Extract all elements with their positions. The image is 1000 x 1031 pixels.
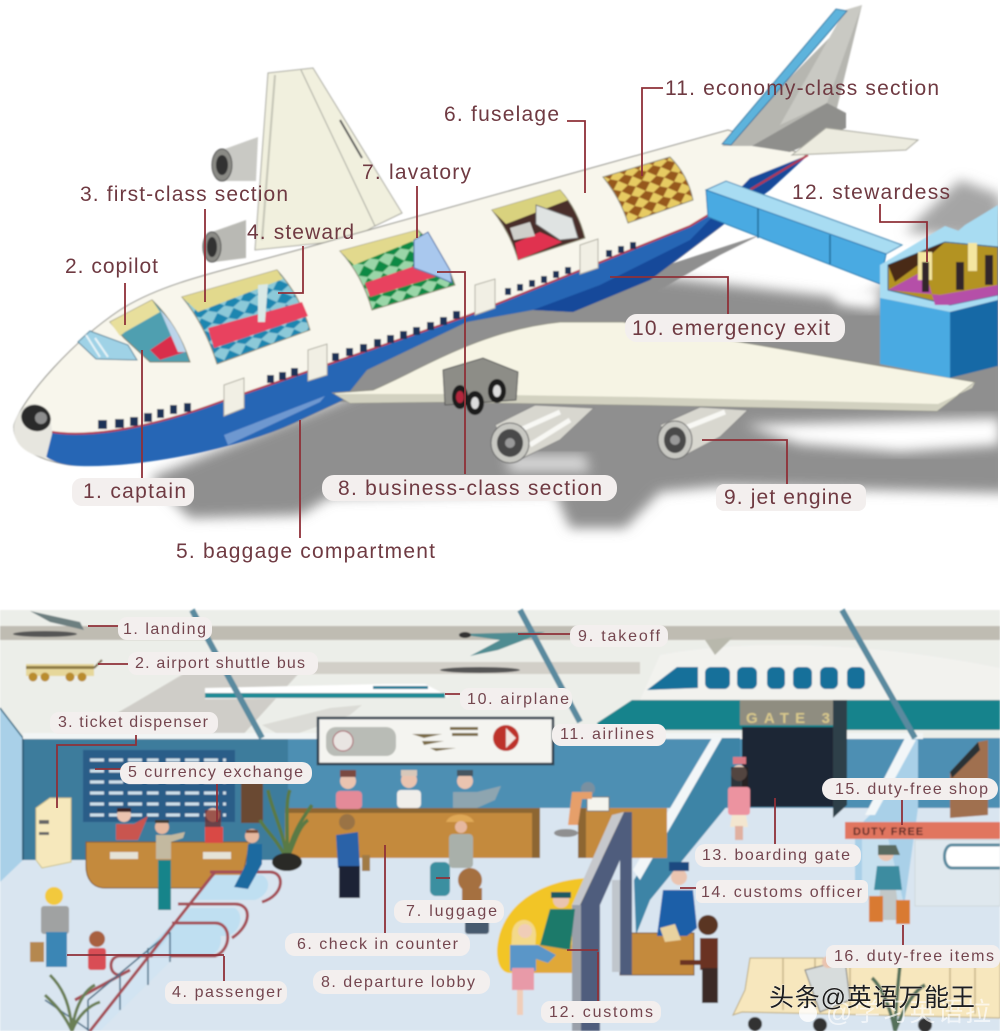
people: stewardess — [728, 757, 750, 840]
label: 4. steward: 4. steward — [247, 221, 354, 244]
watermark: @学习英语拉 — [826, 997, 991, 1027]
label: 5. baggage compartment: 5. baggage compartment — [176, 540, 435, 563]
label: 9. takeoff: 9. takeoff — [578, 628, 661, 645]
label: 15. duty-free shop — [822, 778, 998, 800]
terminal illustration — [0, 610, 1000, 1031]
people: boy and girl in queue — [30, 887, 106, 970]
panel: airport terminal scene — [0, 610, 1000, 1031]
label: 12. customs — [541, 1001, 661, 1023]
blue ramp — [633, 738, 740, 935]
label: 2. airport shuttle bus — [128, 652, 318, 675]
distant airplane — [205, 684, 450, 738]
desk at far gate — [578, 797, 667, 858]
label: 14. customs officer: 14. customs officer — [701, 884, 863, 901]
shop display — [950, 740, 988, 818]
ticket dispenser — [36, 798, 71, 868]
check-in counter — [285, 808, 540, 858]
arrivals board — [83, 750, 235, 822]
people: seated man in blue — [234, 829, 262, 889]
large airplane outside — [597, 637, 1000, 730]
duty free banner — [845, 822, 1000, 839]
label: 11. economy-class section: 11. economy-class section — [665, 77, 939, 100]
label: 8. business-class section: 8. business-class section — [338, 477, 602, 500]
terminal wall — [0, 708, 1000, 1031]
label: 10. airplane: 10. airplane — [467, 691, 569, 708]
cutaway: first-class section — [182, 270, 310, 364]
man reading newspaper — [805, 956, 850, 1012]
label: 12. stewardess: 12. stewardess — [792, 181, 950, 204]
label: 8. departure lobby — [313, 970, 490, 994]
label: 5 currency exchange: 5 currency exchange — [128, 764, 303, 781]
far wing — [255, 68, 402, 250]
label: 7. luggage: 7. luggage — [406, 903, 497, 920]
jet engine right — [658, 407, 748, 459]
airlines sign — [318, 718, 553, 764]
belly panels and windows — [98, 239, 636, 445]
label: 1. captain: 1. captain — [83, 480, 186, 503]
tail stabilizer — [792, 128, 918, 155]
glass railing — [45, 872, 215, 1031]
leader lines — [125, 88, 927, 538]
people: check-in passenger — [336, 814, 370, 898]
jet bridge — [706, 181, 902, 284]
plant bottom left — [45, 975, 100, 1031]
label: 11. airlines — [552, 724, 666, 746]
label: 12. customs: 12. customs — [549, 1004, 653, 1021]
label: 2. airport shuttle bus: 2. airport shuttle bus — [135, 655, 305, 672]
label: 16. duty-free items — [826, 945, 1000, 968]
departures counter — [86, 842, 250, 888]
label: 1. captain — [72, 478, 194, 506]
people: seated customs agent — [540, 892, 575, 950]
label: 9. takeoff — [570, 625, 668, 647]
cutaway: cockpit — [110, 300, 190, 362]
label: 16. duty-free items: 16. duty-free items — [834, 948, 994, 965]
cutaway: economy-class section — [603, 157, 693, 223]
label: 4. passenger: 4. passenger — [172, 984, 283, 1001]
plant by seats — [872, 965, 925, 1031]
label: 1. landing: 1. landing — [123, 621, 206, 638]
terminal rotunda with stewardess — [880, 205, 998, 378]
people: man in hat with luggage — [430, 814, 482, 902]
label: 6. check in counter: 6. check in counter — [297, 936, 459, 953]
far engines — [203, 137, 258, 262]
queue barrier stanchions — [75, 872, 280, 1000]
airport shuttle bus — [26, 660, 102, 682]
label: 15. duty-free shop: 15. duty-free shop — [835, 781, 988, 798]
label: 10. emergency exit: 10. emergency exit — [632, 317, 830, 340]
takeoff plane — [440, 632, 545, 673]
panel: airplane cutaway diagram — [14, 5, 1000, 563]
people: check-in clerks — [336, 770, 501, 809]
label: 3. ticket dispenser — [50, 712, 218, 734]
people: blonde woman — [510, 920, 556, 1015]
label: 11. airlines: 11. airlines — [560, 726, 654, 743]
gate 3 — [740, 700, 847, 818]
label: 9. jet engine: 9. jet engine — [724, 486, 852, 509]
cutaway: galley — [492, 190, 585, 260]
waiting area seats — [733, 958, 1000, 1031]
leader lines — [57, 626, 903, 1001]
luggage — [465, 920, 489, 934]
jet engine left — [491, 405, 594, 463]
airplane illustration — [14, 5, 1000, 528]
fuselage — [14, 130, 808, 466]
people: customs officer and traveler — [657, 862, 718, 1003]
glass column — [855, 738, 918, 900]
ground shadows — [150, 180, 1000, 528]
gate 3: GATE 3 — [746, 710, 830, 727]
label: 7. luggage — [394, 900, 504, 923]
tail fin — [722, 5, 862, 152]
label: 7. lavatory: 7. lavatory — [362, 161, 472, 184]
label: 6. check in counter — [285, 933, 470, 956]
duty free banner: DUTY FREE — [853, 826, 924, 838]
label: 8. departure lobby: 8. departure lobby — [321, 974, 475, 991]
label: 4. passenger — [165, 981, 287, 1004]
watermark — [769, 984, 991, 1027]
customs gate frame — [572, 812, 632, 1031]
people: exchange clerks and customer — [116, 808, 223, 910]
customs counter and yellow area — [497, 878, 694, 975]
people: woman with duty-free items — [869, 845, 910, 924]
window mullions — [192, 610, 915, 738]
label: 3. ticket dispenser: 3. ticket dispenser — [58, 714, 209, 731]
label: 6. fuselage: 6. fuselage — [444, 103, 559, 126]
landing plane — [13, 611, 84, 637]
sky and runway — [0, 610, 1000, 750]
duty free shop counter — [915, 840, 1000, 906]
landing gear — [443, 358, 518, 415]
label: 3. first-class section: 3. first-class section — [80, 183, 288, 206]
wood panel behind counter — [241, 783, 263, 823]
people: bent clerk at far desk — [554, 782, 595, 837]
label: 13. boarding gate — [695, 844, 861, 867]
watermark: 头条@英语万能王 — [769, 984, 975, 1012]
plant left of check-in — [260, 790, 312, 871]
near wing — [333, 322, 975, 411]
cutaway: business-class section and lavatory — [340, 230, 455, 310]
label: 13. boarding gate: 13. boarding gate — [702, 847, 850, 864]
label: 2. copilot: 2. copilot — [65, 255, 158, 278]
label: 1. landing — [118, 617, 212, 640]
label: 14. customs officer — [696, 880, 868, 903]
